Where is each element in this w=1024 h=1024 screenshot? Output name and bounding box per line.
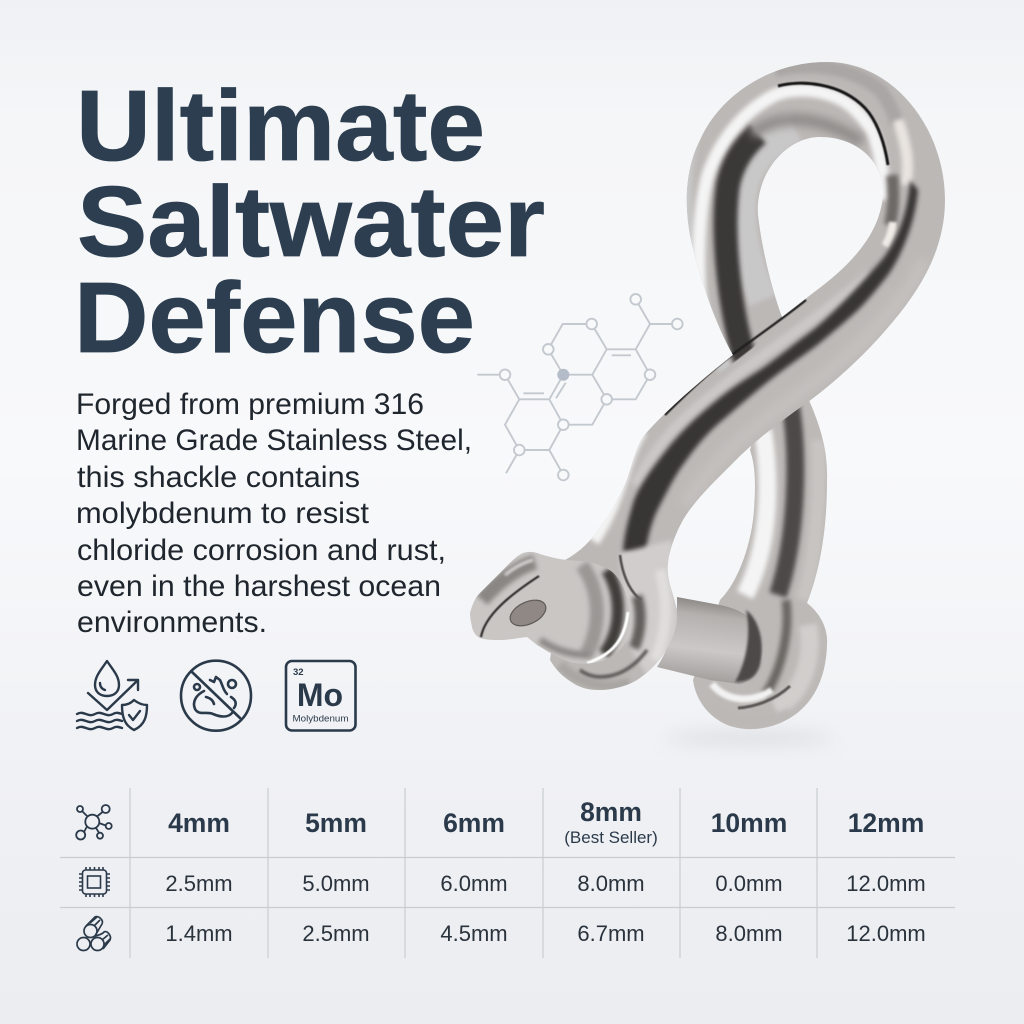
table row two values: 12.0mm [846, 921, 926, 946]
table row one values: 8.0mm [577, 871, 645, 896]
description text block: environments. [77, 606, 267, 639]
table row one values: 0.0mm [715, 871, 783, 896]
table header row: 8mm [580, 797, 642, 827]
molecule diagram [477, 294, 683, 480]
table header row: 6mm [443, 808, 505, 838]
table row one values: 5.0mm [302, 871, 370, 896]
table row one values: 2.5mm [165, 871, 233, 896]
table row one values [165, 871, 926, 896]
table header row: 5mm [305, 808, 367, 838]
table header row: 4mm [168, 808, 230, 838]
title: Defense [74, 262, 475, 374]
table header row: 12mm [848, 808, 924, 838]
table row two values: 4.5mm [440, 921, 508, 946]
table row two values: 6.7mm [577, 921, 645, 946]
shackle photo illustration [60, 50, 960, 958]
title: Ultimate [76, 70, 485, 182]
description text block: this shackle contains [77, 461, 360, 494]
title: Saltwater [77, 166, 545, 278]
description text block: chloride corrosion and rust, [77, 534, 446, 567]
icon: table metal rods [77, 917, 110, 950]
icon: molybdenum element tile [286, 661, 356, 730]
icon: water drop with shield [77, 661, 147, 730]
table header row [168, 797, 924, 847]
table row one values: 6.0mm [440, 871, 508, 896]
shackle back leg and right eye [693, 401, 828, 730]
icon: table molecule [76, 805, 112, 840]
table header row: (Best Seller) [564, 828, 658, 847]
icon: molybdenum element tile: Molybdenum [292, 714, 349, 724]
description text block: even in the harshest ocean [77, 570, 441, 603]
icon: molybdenum element tile: 32 [293, 667, 304, 678]
shackle pin shaft [657, 597, 764, 684]
description text block: molybdenum to resist [76, 497, 369, 530]
description text block: Forged from premium 316 [76, 388, 424, 421]
diagonal strand shading [592, 180, 925, 556]
icon: table chip [79, 867, 110, 897]
shackle loop and front strand [540, 50, 960, 700]
table row one values: 12.0mm [846, 871, 926, 896]
left strand and top of loop shading [685, 66, 907, 370]
diagonal strand body [640, 285, 888, 540]
table row two values [165, 921, 926, 946]
description text block: Marine Grade Stainless Steel, [76, 424, 472, 457]
icon: molybdenum element tile: Mo [297, 677, 343, 713]
shackle pin head and collar [470, 552, 630, 664]
table row two values: 1.4mm [165, 921, 233, 946]
table header row: 10mm [711, 808, 787, 838]
icon: no corrosion [181, 661, 251, 731]
description text block [76, 388, 472, 639]
table row two values: 2.5mm [302, 921, 370, 946]
specification table [60, 788, 955, 958]
left fork eye shading [560, 540, 680, 686]
title [74, 70, 545, 374]
table row two values: 8.0mm [715, 921, 783, 946]
